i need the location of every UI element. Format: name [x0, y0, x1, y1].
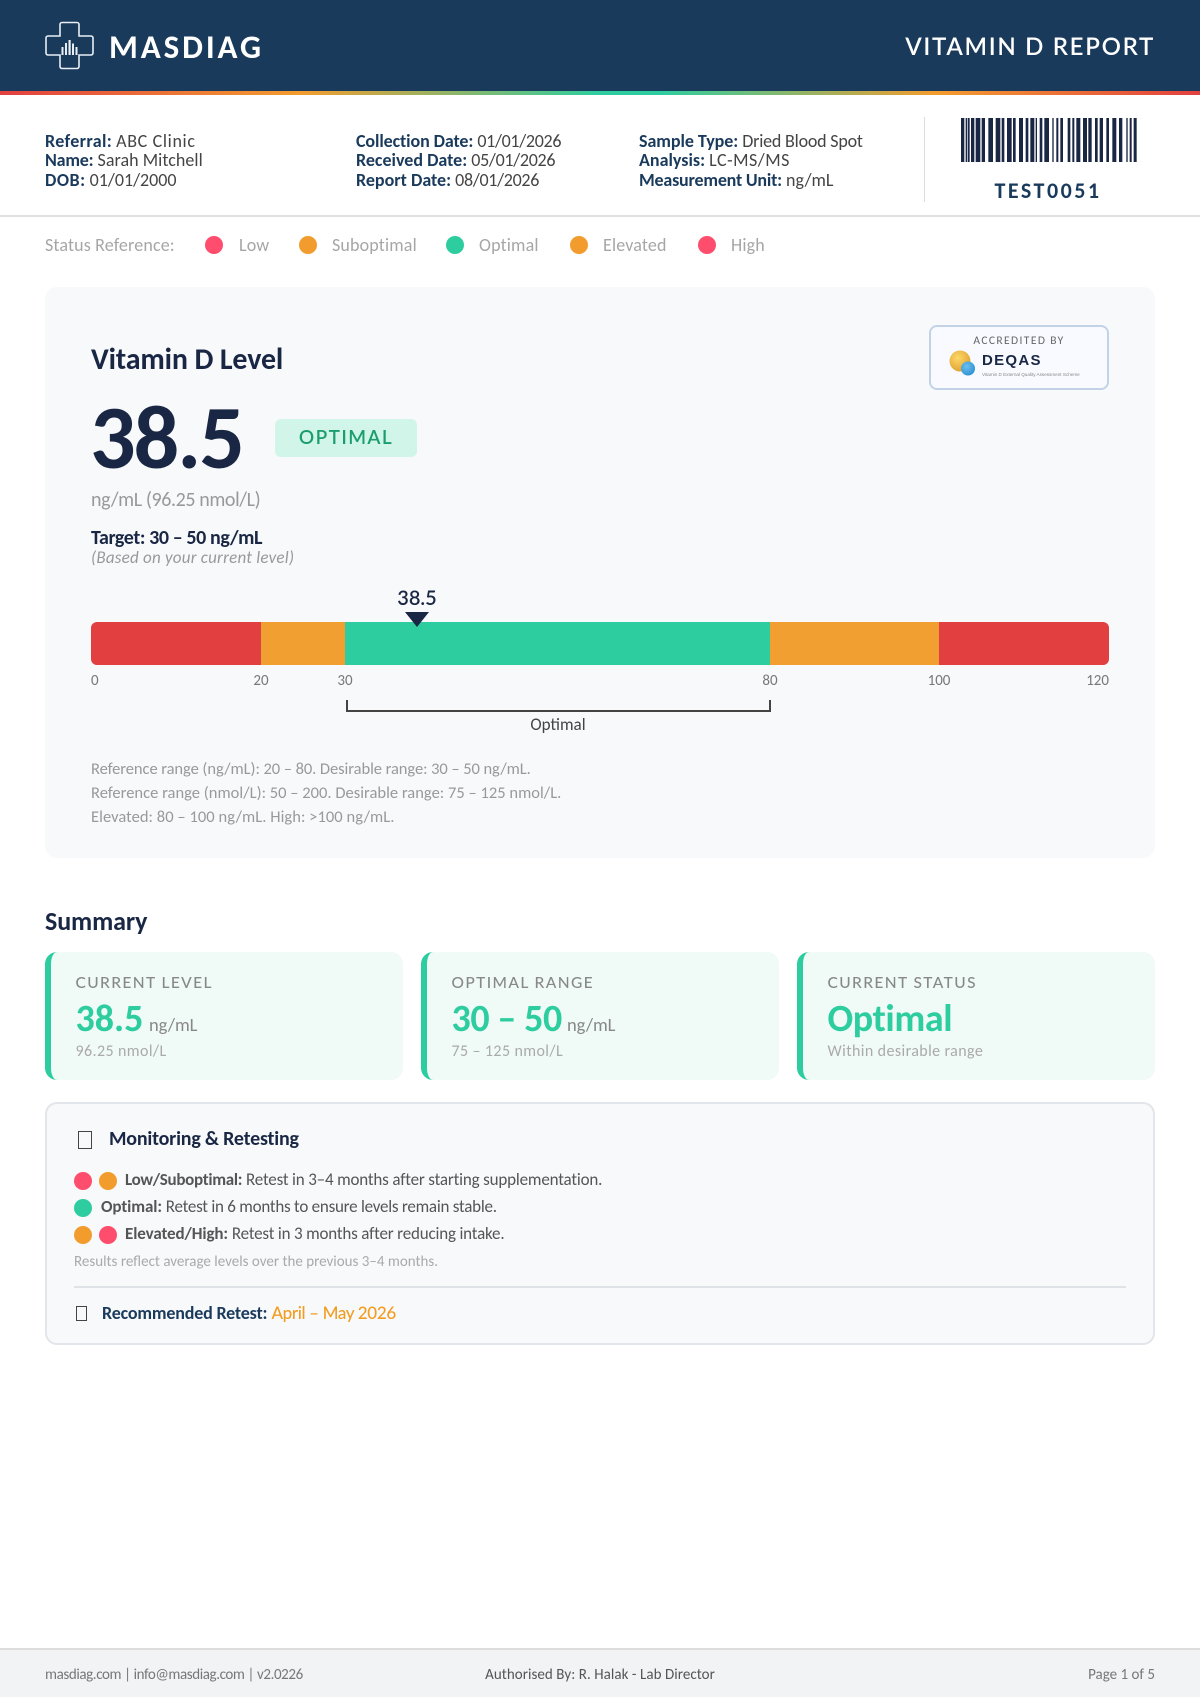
- results note: Results reflect average levels over the previous 3–4 months.: [74, 1253, 438, 1271]
- scale labels: [91, 672, 1109, 690]
- footer page number: Page 1 of 5: [1088, 1666, 1155, 1684]
- patient details column: DOB: 01/01/2000: [45, 169, 177, 191]
- card: current status: Optimal: [828, 996, 952, 1042]
- barcode: [961, 118, 1137, 162]
- range bar: [91, 622, 1109, 665]
- status legend: High: [731, 234, 765, 256]
- row: low and suboptimal: Low/Suboptimal: Retest in 3–4 months after starting supplementation.: [125, 1169, 602, 1190]
- sample column: Measurement Unit: ng/mL: [639, 169, 833, 191]
- reference notes: Reference range (nmol/L): 50 – 200. Desirable range: 75 – 125 nmol/L.: [91, 783, 561, 803]
- sample ID: TEST0051: [994, 177, 1102, 204]
- status badge: OPTIMAL: [299, 426, 393, 448]
- sample column: Sample Type: Dried Blood Spot: [639, 130, 863, 152]
- dates column: Collection Date: 01/01/2026: [356, 130, 561, 152]
- card: current level: 96.25 nmol/L: [76, 1042, 167, 1061]
- status legend: Optimal: [479, 234, 539, 256]
- footer: [0, 1648, 1200, 1697]
- monitoring heading: Monitoring & Retesting: [109, 1127, 299, 1151]
- card: current status: CURRENT STATUS: [828, 974, 977, 992]
- status legend: Low: [239, 234, 269, 256]
- marker triangle: [405, 612, 429, 627]
- accreditation badge: DEQAS: [982, 352, 1042, 369]
- patient details column: Name: Sarah Mitchell: [45, 149, 203, 171]
- status legend: Suboptimal: [332, 234, 417, 256]
- dates column: [356, 130, 561, 191]
- optimal bracket: [346, 700, 771, 712]
- accreditation badge: Vitamin D External Quality Assessment Scheme: [982, 372, 1080, 377]
- scale labels: 100: [928, 672, 950, 690]
- panel: monitoring and retesting: [45, 1102, 1155, 1345]
- scale labels: 80: [762, 672, 778, 690]
- bracket label: Optimal: [530, 714, 586, 735]
- header band: [0, 0, 1200, 95]
- icon: missing glyph box: [78, 1131, 92, 1149]
- target: Target: 30 – 50 ng/mL: [91, 526, 262, 550]
- main value: 38.5: [90, 383, 243, 493]
- status legend: Status Reference:: [45, 234, 175, 256]
- icon: missing glyph box small: [76, 1306, 86, 1321]
- card: current level: [45, 952, 403, 1080]
- scale labels: 30: [337, 672, 353, 690]
- target note: (Based on your current level): [91, 547, 294, 568]
- footer authoriser: Authorised By: R. Halak - Lab Director: [485, 1666, 715, 1684]
- status badge: [275, 418, 417, 456]
- panel heading: Vitamin D Level: [91, 341, 283, 378]
- card: optimal range: 30 – 50 ng/mL: [452, 996, 615, 1042]
- scale labels: 0: [91, 672, 99, 690]
- scale labels: 120: [1086, 672, 1109, 690]
- accreditation badge: ACCREDITED BY: [973, 334, 1065, 348]
- card: optimal range: [421, 952, 779, 1080]
- reference notes: Reference range (ng/mL): 20 – 80. Desirable range: 30 – 50 ng/mL.: [91, 759, 531, 779]
- row: optimal: Optimal: Retest in 6 months to ensure levels remain stable.: [101, 1196, 497, 1217]
- summary heading: Summary: [45, 904, 147, 936]
- card: current level: CURRENT LEVEL: [76, 974, 213, 992]
- patient details column: [45, 130, 203, 191]
- row: elevated and high: Elevated/High: Retest in 3 months after reducing intake.: [125, 1223, 504, 1244]
- rainbow stripe: [0, 91, 1200, 95]
- brand name: MASDIAG: [109, 26, 264, 66]
- status legend: [45, 234, 765, 256]
- footer contact: masdiag.com | info@masdiag.com | v2.0226: [45, 1666, 303, 1684]
- dates column: Report Date: 08/01/2026: [356, 169, 539, 191]
- card: current status: Within desirable range: [828, 1042, 983, 1061]
- reference notes: [91, 759, 561, 827]
- marker value: 38.5: [397, 586, 437, 610]
- sample column: Analysis: LC-MS/MS: [639, 149, 790, 171]
- status legend: Elevated: [603, 234, 667, 256]
- card: optimal range: 75 – 125 nmol/L: [452, 1042, 563, 1061]
- panel: vitamin D level: [45, 287, 1155, 858]
- recommended retest: Recommended Retest: April – May 2026: [102, 1302, 396, 1324]
- sample column: [639, 130, 863, 191]
- logo icon: medical cross with bars: [45, 22, 94, 70]
- card: current status: [797, 952, 1155, 1080]
- card: optimal range: OPTIMAL RANGE: [452, 974, 594, 992]
- reference notes: Elevated: 80 – 100 ng/mL. High: >100 ng/mL.: [91, 807, 394, 827]
- patient details column: Referral: ABC Clinic: [45, 130, 196, 152]
- units: ng/mL (96.25 nmol/L): [91, 488, 260, 512]
- report title: VITAMIN D REPORT: [905, 32, 1155, 60]
- dates column: Received Date: 05/01/2026: [356, 149, 555, 171]
- scale labels: 20: [253, 672, 269, 690]
- card: current level: 38.5 ng/mL: [76, 996, 197, 1042]
- accreditation badge: [929, 325, 1109, 390]
